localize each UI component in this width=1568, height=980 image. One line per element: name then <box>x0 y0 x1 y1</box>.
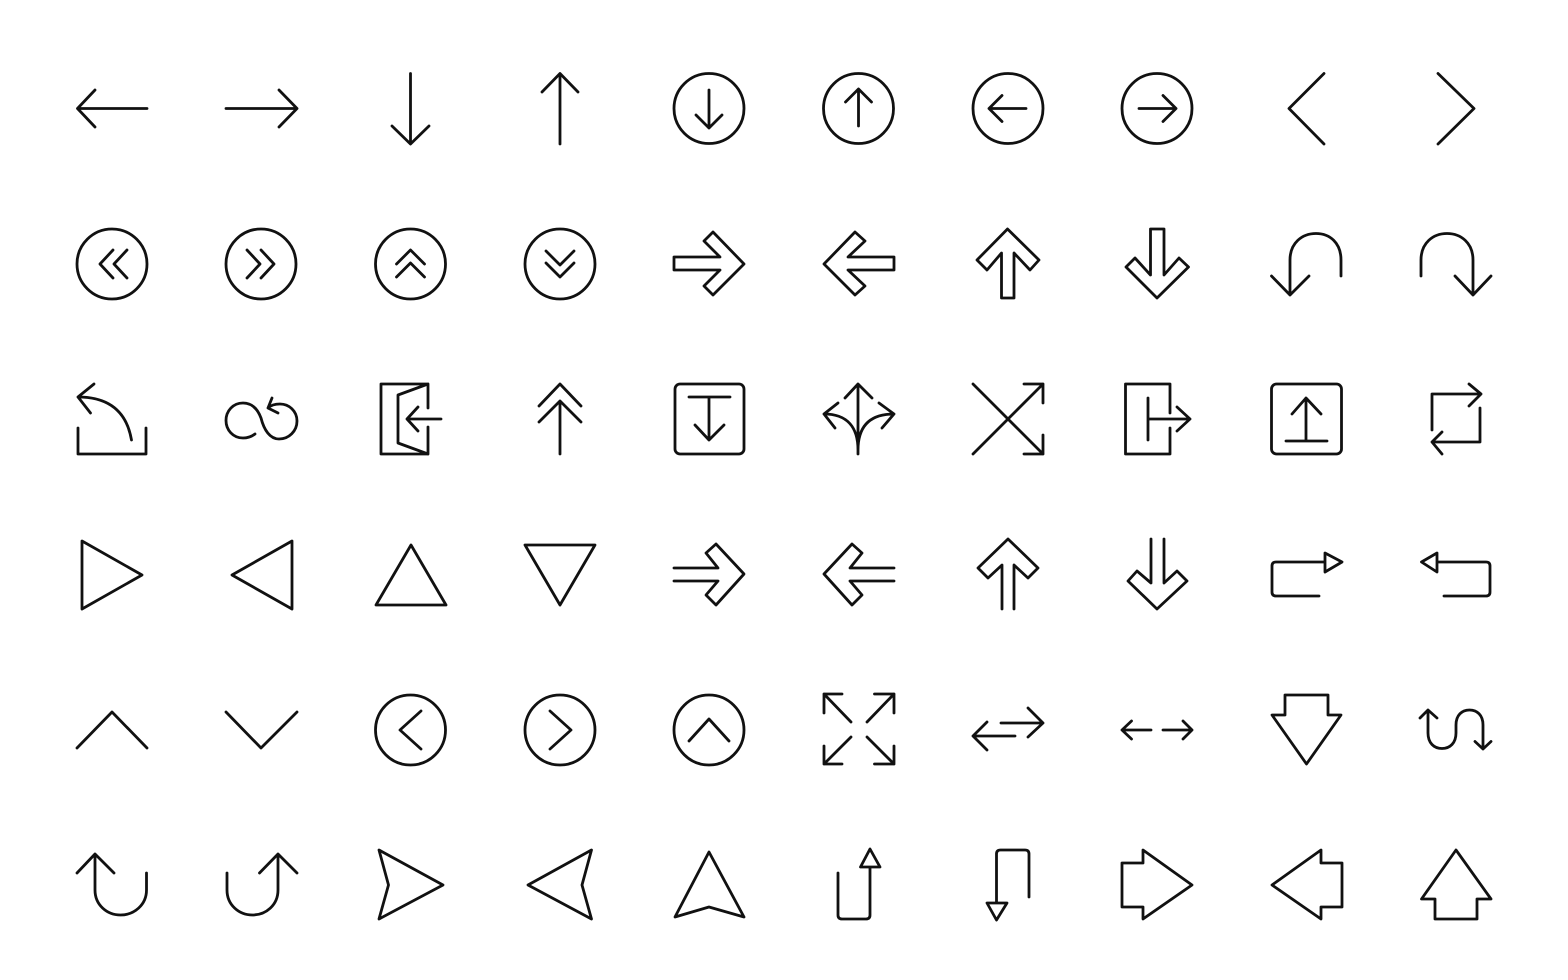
icon: shuffle arrows <box>973 384 1043 454</box>
icon: circled double chevron down <box>525 229 595 299</box>
icon: swap arrows <box>973 708 1043 750</box>
icon: navigation pointer right <box>379 850 443 919</box>
icon: house arrow right <box>1122 850 1192 919</box>
icon: share from tray <box>78 384 146 454</box>
icon: u-turn left down <box>1272 234 1341 295</box>
icon: triangle down <box>525 545 595 605</box>
icon: exit door <box>1126 384 1190 454</box>
icon: chevron up <box>77 712 147 748</box>
icon: return arrow right <box>1272 553 1342 596</box>
icon: three-way split arrow <box>824 384 894 454</box>
icon: circled double chevron right <box>226 229 296 299</box>
icon: hook arrow down <box>987 850 1029 920</box>
icon: chevron down <box>226 712 297 748</box>
icon: triangle right <box>82 541 142 609</box>
icon: u-turn arrow up left <box>77 854 146 915</box>
icon: block arrow up <box>977 229 1039 298</box>
icon: sign in door <box>381 384 441 454</box>
icon: infinity loop arrow <box>226 398 297 439</box>
icon: circled arrow right <box>1122 74 1192 144</box>
icon: house arrow left <box>1272 850 1342 919</box>
icon: upload box <box>1272 384 1342 454</box>
icon: triangle up <box>376 545 446 605</box>
icon: small left and right arrows <box>1122 721 1192 739</box>
icon: download box <box>675 384 744 454</box>
icon: repeat arrows <box>1432 384 1481 454</box>
icon: open block arrow up <box>978 539 1038 609</box>
icon: arrow down <box>392 74 429 144</box>
icon: circled double chevron left <box>77 229 147 299</box>
icon: circled double chevron up <box>376 229 446 299</box>
icon: circled arrow up <box>824 74 894 144</box>
icon: s-curve arrows <box>1420 710 1491 749</box>
icon: house arrow up <box>1422 850 1491 919</box>
icon: hook arrow up <box>838 849 880 919</box>
icon: circled chevron up <box>674 695 744 765</box>
icon: open block arrow left <box>824 544 894 605</box>
icon: arrow up <box>542 74 578 144</box>
icon: block arrow left <box>824 232 894 295</box>
icon: block arrow down <box>1126 229 1188 298</box>
icon: return arrow left <box>1422 553 1490 596</box>
icon: arrow left <box>78 90 147 127</box>
icon: expand arrows <box>824 694 894 764</box>
icon: double chevron up arrow <box>539 384 581 454</box>
icon: u-turn right down <box>1421 234 1491 295</box>
icon: circled arrow down <box>674 74 744 144</box>
icon: block arrow right <box>674 232 744 295</box>
icon: chevron right <box>1438 74 1474 144</box>
icon: navigation pointer up <box>675 852 744 917</box>
icon: chevron left <box>1289 74 1324 144</box>
icon: navigation pointer left <box>528 850 592 919</box>
icon: circled arrow left <box>973 74 1043 144</box>
icon: arrow right <box>226 90 297 127</box>
icon: u-turn arrow up right <box>227 854 297 915</box>
icon: circled chevron left <box>376 695 446 765</box>
icon: open block arrow down <box>1128 539 1187 609</box>
icon: triangle left <box>232 541 292 609</box>
icon: block arrow down large <box>1272 695 1341 764</box>
icon: open block arrow right <box>674 544 744 605</box>
icon: circled chevron right <box>525 695 595 765</box>
